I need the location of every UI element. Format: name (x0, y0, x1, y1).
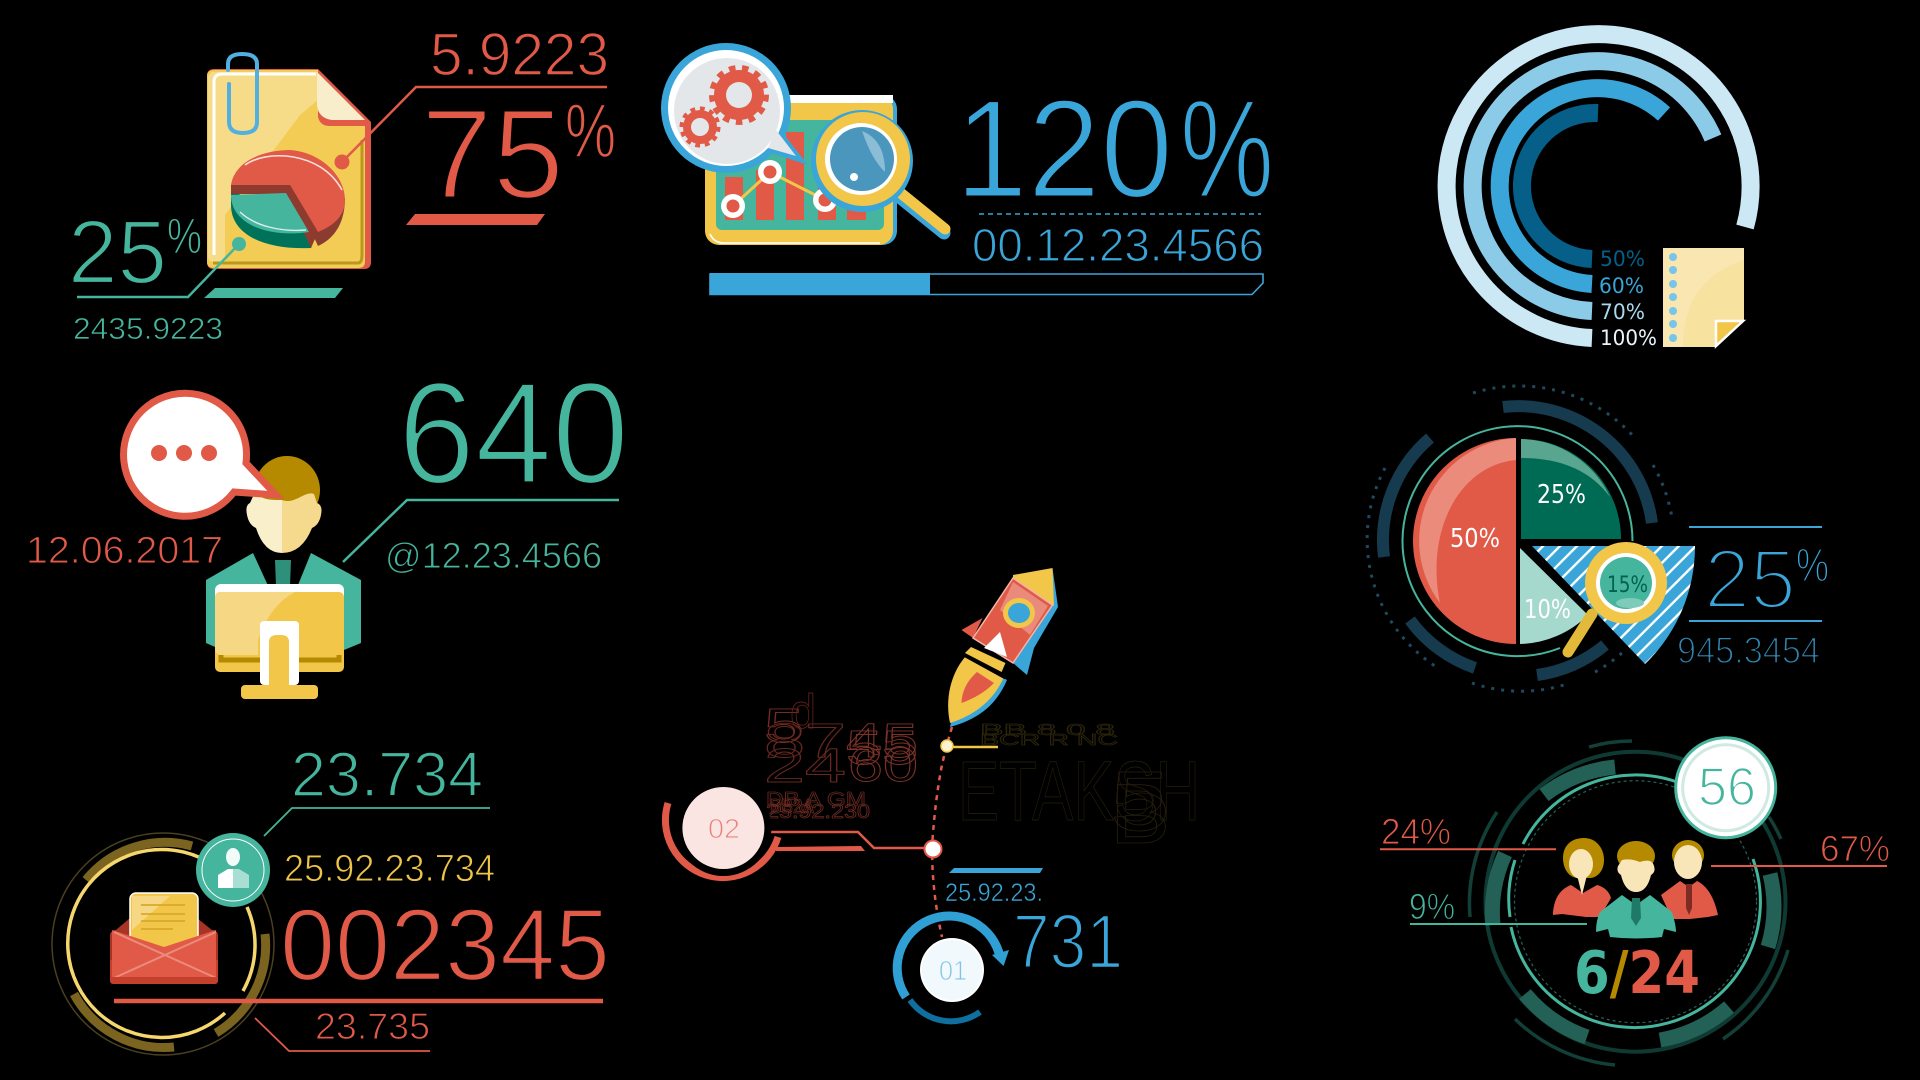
green leader line (264, 808, 490, 836)
thin outer arcs (1469, 741, 1788, 1065)
ring 50% (1522, 113, 1598, 259)
icon: rocket (948, 568, 1058, 727)
ring 70% (1473, 61, 1713, 311)
red bar (406, 214, 545, 225)
leader dot green (232, 237, 246, 251)
step 02 arc (665, 803, 778, 878)
panel: team ring (1380, 738, 1890, 1065)
ghost text red: 24 (764, 740, 846, 793)
icon: speech bubble dots (124, 393, 276, 516)
red rule (114, 999, 603, 1003)
person: man center (1596, 841, 1676, 938)
label 15%: 15% (1607, 573, 1648, 598)
ghost text yellow: BCR R NC (980, 732, 1118, 749)
5.9223 leader line (342, 87, 607, 162)
ghost text red (764, 686, 918, 823)
teal ring (1509, 775, 1760, 1028)
value 25: 25 (68, 203, 167, 303)
green bar (204, 288, 343, 298)
green leader line (77, 244, 239, 297)
dotted outer ring (1367, 386, 1672, 691)
slice 50% (1413, 438, 1516, 644)
value @12.23.4566: @12.23.4566 (385, 535, 602, 576)
icon: envelope (110, 893, 218, 984)
icon: magnifier 15% (1568, 542, 1667, 652)
gold ring segments (74, 842, 266, 1048)
value 00.12.23.4566: 00.12.23.4566 (972, 219, 1264, 271)
icon: speech bubble with gears (661, 43, 808, 173)
value 5.9223: 5.9223 (430, 21, 609, 88)
date 12.06.2017: 12.06.2017 (26, 530, 223, 572)
label 60%: 60% (1599, 274, 1644, 298)
dotted path (932, 727, 952, 937)
ghost text red: BB2A (770, 796, 815, 818)
dark segmented ring (1383, 406, 1652, 675)
icon: magnifying glass (811, 110, 945, 233)
red leader line (255, 1018, 430, 1051)
step 02 circle (675, 780, 771, 876)
red node (924, 840, 942, 858)
label 50%: 50% (1450, 524, 1500, 554)
value 25.92.23.: 25.92.23. (945, 879, 1043, 907)
top rule (1689, 526, 1822, 528)
person: woman (1553, 838, 1611, 917)
panel: pie chart with magnifier (1367, 386, 1829, 691)
value 75: 75 (421, 83, 564, 226)
yellow node and line (941, 740, 998, 752)
ghost text yellow: 5 (1110, 754, 1170, 848)
value 731: 731 (1013, 899, 1123, 985)
ghost text yellow (958, 722, 1200, 861)
yellow ring (68, 849, 255, 1037)
value 640: 640 (398, 352, 629, 514)
value 945.3454: 945.3454 (1677, 630, 1820, 671)
teal ring (1402, 426, 1632, 656)
label 25%: 25% (1537, 480, 1586, 510)
icon: person at computer (206, 456, 361, 699)
slice 15% hatched (1532, 546, 1695, 664)
icon: document with pie chart (207, 69, 371, 269)
value 9%: 9% (1409, 886, 1455, 927)
value 67%: 67% (1820, 828, 1890, 869)
ghost text red: 5 (764, 700, 804, 753)
panel: email 002345 (52, 740, 610, 1055)
ghost text yellow: B (1110, 767, 1170, 861)
panel: person with computer 640 (26, 352, 629, 699)
ghost text red: 25.92.230 (766, 801, 870, 823)
red connector (764, 832, 925, 848)
panel: rocket timeline (665, 568, 1200, 1021)
value 24%: 24% (1381, 811, 1451, 852)
value 23.734: 23.734 (291, 740, 483, 810)
ghost text red: 45 (846, 715, 918, 768)
ghost text red: 55 (846, 722, 918, 775)
slice 25% (1521, 439, 1621, 539)
value 25.92.23.734: 25.92.23.734 (284, 848, 495, 890)
panel: document pie 75% / 25% (68, 21, 616, 346)
value 002345: 002345 (280, 888, 610, 1002)
leader 9% (1410, 923, 1587, 925)
green leader line (343, 500, 619, 562)
icon: chart board (705, 95, 897, 245)
progress bar (710, 273, 1263, 295)
ghost text yellow: BB 8 0 8 (980, 722, 1115, 739)
value 23.735: 23.735 (315, 1006, 430, 1047)
panel: analytics 120% (661, 43, 1274, 295)
ring 60% (1500, 88, 1664, 284)
label 10%: 10% (1524, 595, 1571, 625)
bottom rule (1689, 620, 1822, 622)
ghost text red: DB A GM (766, 789, 866, 811)
value 2435.9223: 2435.9223 (73, 311, 223, 346)
step 01 arc with arrow (897, 916, 1009, 1021)
ghost text red: d (790, 686, 816, 739)
ghost text yellow: ETAKSH (958, 744, 1200, 838)
ratio 6/24: 6/24 (1574, 938, 1700, 1007)
step 02 circle: 02 (708, 813, 740, 844)
ring 100% (1447, 34, 1751, 338)
step 01 circle: 01 (939, 955, 967, 986)
leader dot red (334, 154, 350, 170)
blue bar (949, 868, 1043, 873)
value 25: 25 (1704, 532, 1796, 626)
icon: paperclip (228, 54, 257, 133)
thin outer ring (52, 833, 274, 1055)
label 70%: 70% (1600, 300, 1645, 324)
percent sign red: % (565, 89, 616, 174)
percent sign blue: % (1180, 70, 1274, 227)
badge 56: 56 (1698, 757, 1756, 817)
dashed inner ring (1514, 781, 1756, 1023)
panel: concentric ring chart (1447, 34, 1751, 350)
badge 56 (1676, 738, 1776, 838)
slice 10% (1520, 548, 1588, 644)
icon: note page (1663, 248, 1744, 347)
dashed divider (979, 213, 1261, 215)
value 120: 120 (955, 70, 1173, 227)
ghost text red: 60 (848, 739, 918, 792)
label 50%: 50% (1600, 247, 1645, 271)
thick ring segments (1492, 767, 1774, 1040)
step 01 circle (920, 938, 984, 1002)
outer ring (1486, 752, 1786, 1052)
percent sign: % (1796, 538, 1829, 591)
leader 67% (1711, 865, 1887, 867)
label 100%: 100% (1600, 326, 1657, 350)
percent sign green: % (167, 208, 202, 264)
ghost text red: 87 (764, 715, 846, 768)
icon: person badge (196, 833, 270, 907)
leader 24% (1380, 848, 1556, 850)
red thick bar (776, 846, 865, 851)
person: man right (1661, 840, 1718, 919)
